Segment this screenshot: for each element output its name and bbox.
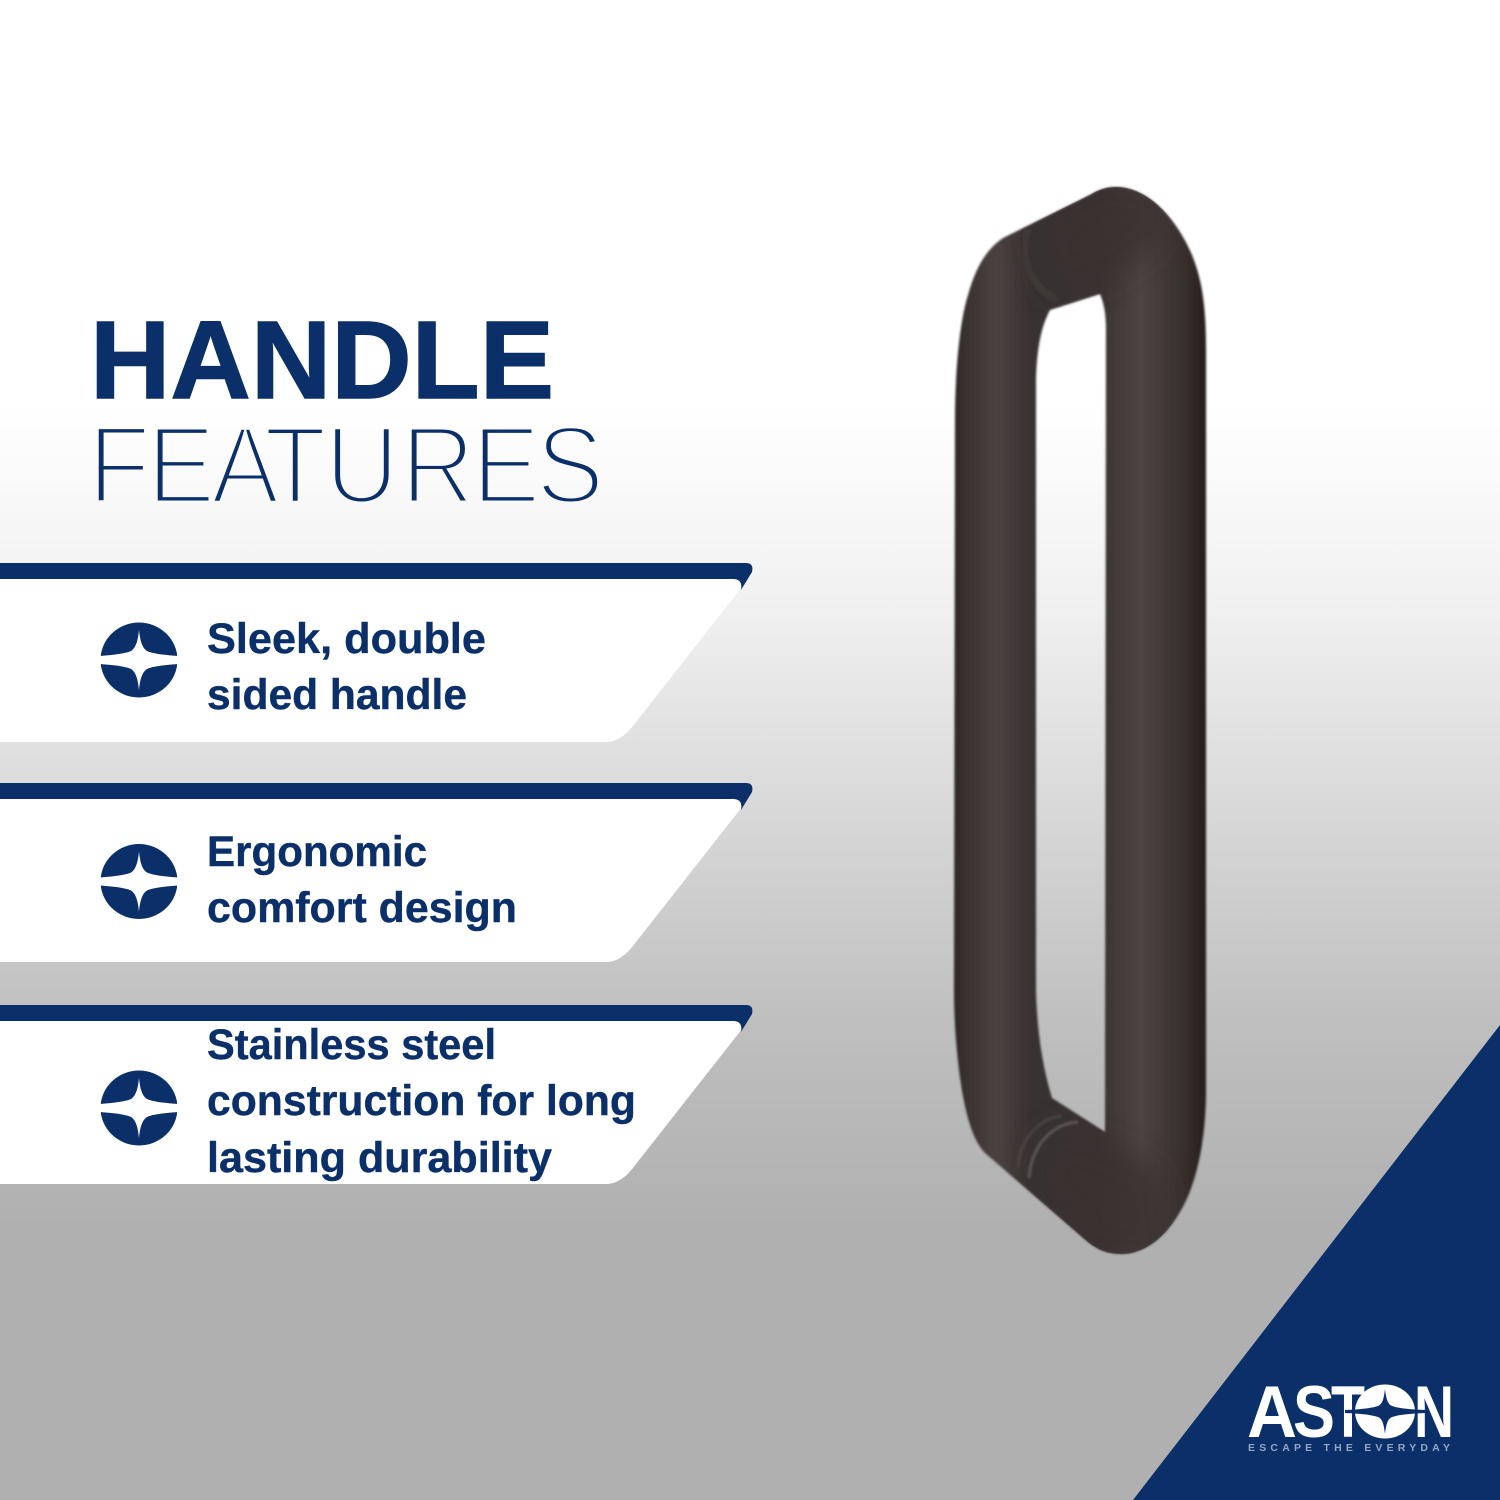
logo wordmark: O: [1360, 1372, 1410, 1453]
panel top bar: [0, 563, 752, 590]
bottom joint ring: [1018, 1116, 1078, 1178]
logo wordmark: [1247, 1372, 1454, 1453]
logo wordmark: T: [1331, 1372, 1365, 1453]
heading line: FEATURES: FEATURES: [88, 404, 604, 527]
feature text: construction for long: [207, 1077, 636, 1125]
logo star emblem: [1345, 1384, 1427, 1438]
logo: ASTON: [1247, 1372, 1454, 1454]
panel: feature 3: [0, 1005, 752, 1184]
feature text: [207, 828, 517, 932]
heading line: HANDLE: HANDLE: [90, 299, 554, 422]
handle body: [954, 187, 1206, 1254]
feature text: Sleek, double: [207, 615, 486, 663]
top joint ring: [1025, 229, 1057, 300]
heading: [88, 299, 604, 527]
panel background: [0, 795, 744, 962]
panel: feature 1: [0, 563, 752, 742]
panel background: [0, 575, 744, 742]
feature text: Stainless steel: [207, 1021, 496, 1069]
panel: feature 2: [0, 783, 752, 962]
logo tagline: ESCAPE THE EVERYDAY: [1248, 1442, 1450, 1454]
panel background: [0, 1017, 744, 1184]
logo wordmark: N: [1414, 1372, 1454, 1453]
corner triangle: [1133, 1025, 1500, 1500]
logo wordmark: S: [1293, 1372, 1335, 1453]
logo wordmark: A: [1247, 1372, 1297, 1453]
feature text: Ergonomic: [207, 828, 427, 876]
feature text: comfort design: [207, 884, 517, 932]
icon: star in circle: [100, 844, 178, 919]
panel top bar: [0, 1005, 752, 1032]
feature text: lasting durability: [207, 1134, 552, 1182]
icon: star in circle: [100, 622, 178, 698]
feature text: [207, 1021, 636, 1182]
elbow shading: [1030, 175, 1175, 1265]
product: door handle: [954, 175, 1206, 1265]
feature text: [207, 615, 486, 719]
panel top bar: [0, 783, 752, 810]
icon: star in circle: [100, 1070, 178, 1146]
feature text: sided handle: [207, 671, 467, 719]
